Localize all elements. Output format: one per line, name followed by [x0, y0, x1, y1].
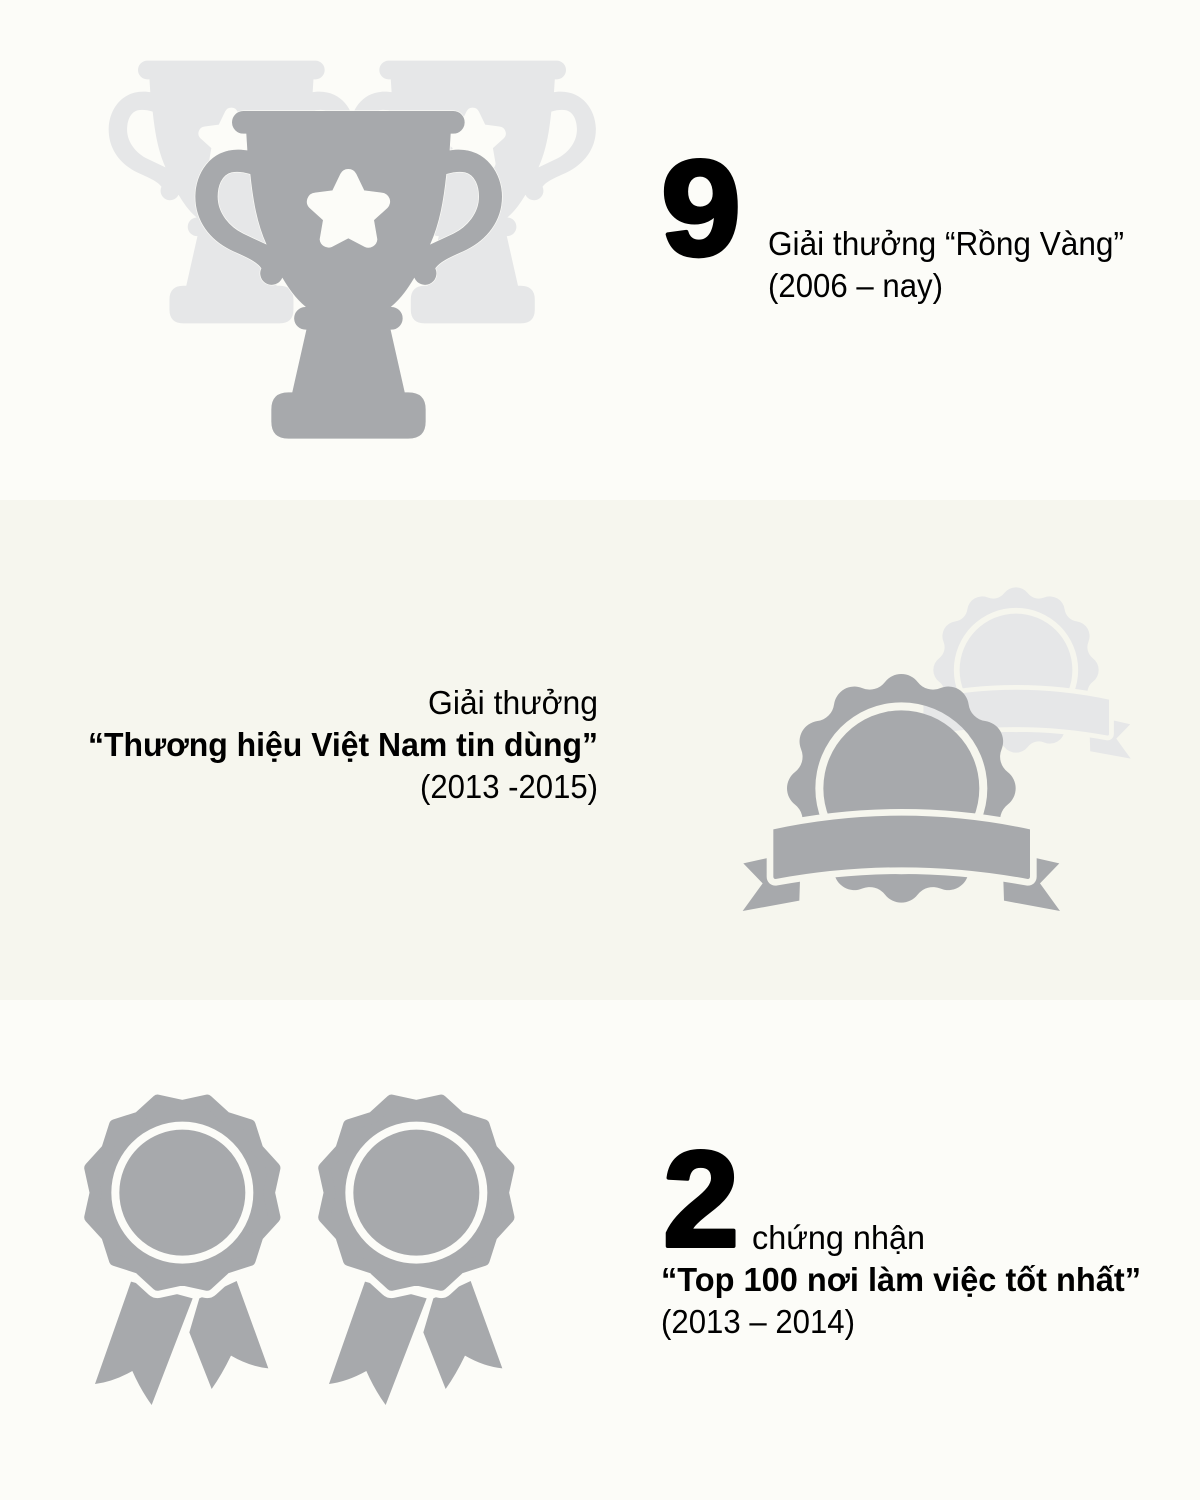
icon: main trophy — [195, 111, 502, 439]
panel: middle band — [0, 500, 1200, 1000]
text: years: (2006 – nay) — [768, 267, 943, 304]
icon: light badge — [901, 587, 1131, 759]
text: award label: Giải thưởng — [428, 684, 598, 721]
number 9: 9 — [661, 132, 741, 284]
text: years: (2013 – 2014) — [661, 1303, 855, 1340]
text: certificate name: “Top 100 nơi làm việc tốt nhất” — [661, 1261, 1141, 1298]
text: award name: Giải thưởng “Rồng Vàng” — [768, 225, 1124, 262]
icon: rosette left — [90, 1101, 274, 1405]
icon: rosette right — [324, 1101, 508, 1405]
text: years: (2013 -2015) — [420, 768, 598, 805]
text: certificate label: chứng nhận — [752, 1219, 925, 1256]
icon: light trophy left — [109, 61, 355, 323]
text: award name: “Thương hiệu Việt Nam tin dùng” — [88, 726, 598, 763]
panel: Rong Vang award — [109, 61, 1124, 439]
icon: light trophy right — [350, 61, 596, 323]
panel: Thuong hieu Viet Nam tin dung award — [88, 587, 1131, 911]
panel: Top 100 certificate — [90, 1101, 1141, 1405]
number 2: 2 — [663, 1123, 739, 1275]
icon: main badge — [743, 674, 1060, 911]
